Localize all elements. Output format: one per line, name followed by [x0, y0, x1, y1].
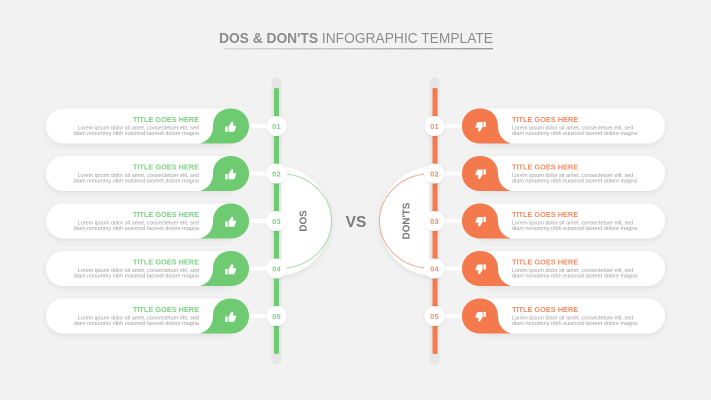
don't item 03: [424, 204, 665, 238]
don't item 03: TITLE GOES HERE: [512, 210, 578, 219]
do item 05: TITLE GOES HERE: [133, 305, 199, 314]
do item 02: 02: [272, 169, 281, 178]
don't item 04: diam nonummy nibh euismod laoreet dolore magna: [512, 274, 638, 280]
do item 02: TITLE GOES HERE: [133, 162, 199, 172]
don't item 04: [424, 251, 665, 286]
do item 04: diam nonummy nibh euismod laoreet dolore magna: [74, 274, 200, 280]
don't item 05: diam nonummy nibh euismod laoreet dolore magna: [512, 321, 638, 327]
don't item 04: 04: [430, 264, 439, 273]
do item 03: 03: [272, 217, 281, 226]
do item 04: [46, 251, 286, 286]
don't item 02: TITLE GOES HERE: [512, 162, 578, 172]
do item 01: diam nonummy nibh euismod laoreet dolore magna: [74, 131, 200, 137]
do item 01: Lorem ipsum dolor sit amet, consectetuer elit, sed: [78, 126, 199, 132]
do item 02: diam nonummy nibh euismod laoreet dolore magna: [74, 178, 200, 184]
don't item 01: diam nonummy nibh euismod laoreet dolore magna: [512, 131, 638, 137]
DON'TS semicircle: [380, 166, 435, 276]
VS label: VS: [346, 214, 366, 231]
do item 03: diam nonummy nibh euismod laoreet dolore magna: [74, 226, 200, 232]
don't item 03: diam nonummy nibh euismod laoreet dolore magna: [512, 226, 638, 232]
don't item 04: TITLE GOES HERE: [512, 258, 578, 266]
don't item 02: diam nonummy nibh euismod laoreet dolore magna: [512, 178, 638, 184]
do item 03: Lorem ipsum dolor sit amet, consectetuer elit, sed: [78, 220, 199, 226]
don't item 05: 05: [430, 312, 439, 321]
don't item 01: [424, 108, 665, 144]
do item 03: TITLE GOES HERE: [133, 210, 199, 219]
don't item 01: TITLE GOES HERE: [512, 115, 578, 124]
do item 05: 05: [272, 312, 281, 321]
don't item 02: Lorem ipsum dolor sit amet, consectetuer elit, sed: [512, 173, 633, 179]
do item 01: 01: [272, 122, 281, 131]
do item 05: diam nonummy nibh euismod laoreet dolore magna: [74, 321, 200, 327]
don't item 01: Lorem ipsum dolor sit amet, consectetuer elit, sed: [512, 126, 633, 132]
do item 04: 04: [272, 264, 281, 273]
do item 01: [46, 108, 286, 144]
do item 05: Lorem ipsum dolor sit amet, consectetuer elit, sed: [78, 316, 199, 322]
DOS semicircle: DOS: [298, 210, 310, 232]
do item 01: TITLE GOES HERE: [133, 115, 199, 124]
green timeline: [272, 77, 282, 365]
don't item 04: Lorem ipsum dolor sit amet, consectetuer elit, sed: [512, 268, 633, 274]
don't item 02: [424, 156, 665, 191]
DON'TS semicircle: DON'TS: [402, 202, 412, 239]
DOS semicircle: [276, 166, 331, 276]
don't item 02: 02: [430, 169, 439, 178]
don't item 05: TITLE GOES HERE: [512, 305, 578, 314]
do item 02: [46, 156, 286, 191]
don't item 03: 03: [430, 217, 439, 226]
don't item 05: [424, 298, 665, 334]
title: DOS & DON'TS INFOGRAPHIC TEMPLATE: [219, 31, 493, 47]
do item 02: Lorem ipsum dolor sit amet, consectetuer elit, sed: [78, 173, 199, 179]
do item 04: Lorem ipsum dolor sit amet, consectetuer elit, sed: [78, 268, 199, 274]
do item 05: [46, 298, 286, 334]
don't item 03: Lorem ipsum dolor sit amet, consectetuer elit, sed: [512, 220, 633, 226]
do item 04: TITLE GOES HERE: [133, 258, 199, 266]
orange timeline: [430, 77, 440, 365]
do item 03: [46, 204, 286, 238]
don't item 01: 01: [430, 122, 439, 131]
don't item 05: Lorem ipsum dolor sit amet, consectetuer elit, sed: [512, 316, 633, 322]
